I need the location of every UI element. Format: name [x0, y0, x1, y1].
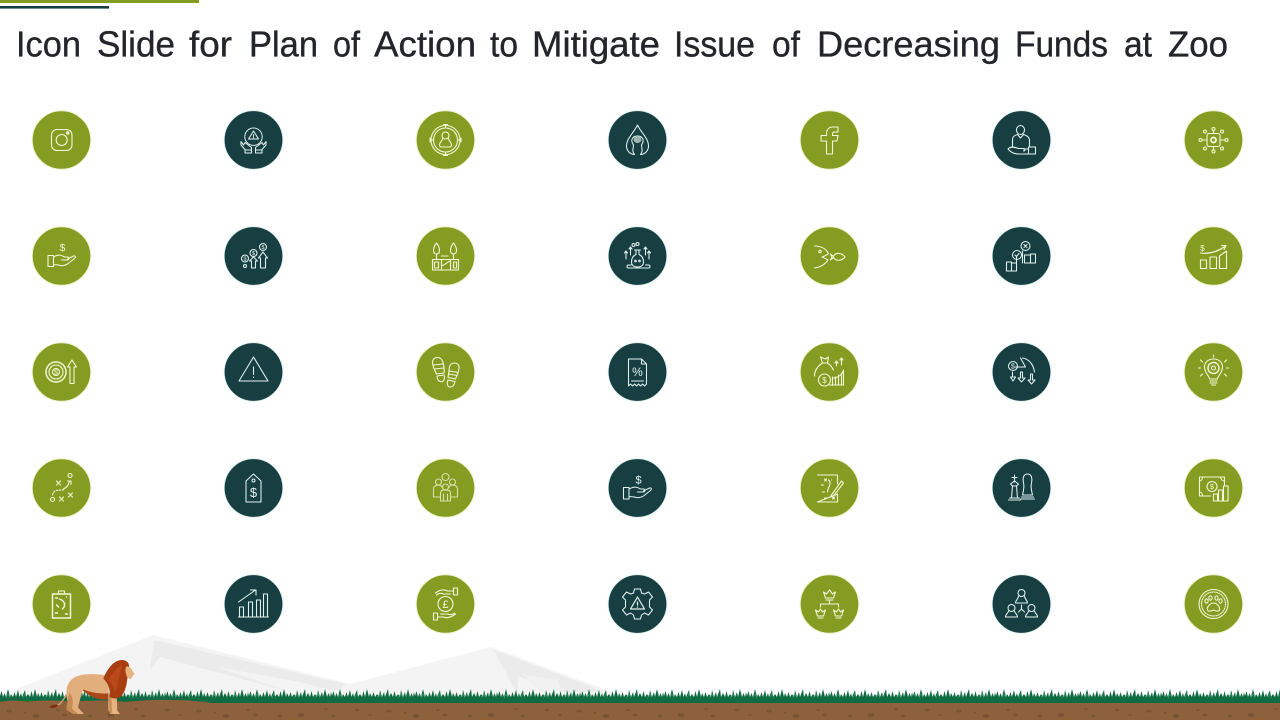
icon: coins with rising arrows: $	[252, 251, 255, 257]
title: for	[189, 24, 232, 64]
mountains	[14, 635, 612, 700]
icon: hands protecting warning	[224, 111, 283, 169]
icon: money bag with bars: $	[822, 376, 827, 385]
icon: percent receipt: %	[632, 365, 643, 379]
title: Icon	[16, 24, 81, 64]
icon: pound coin between hands	[416, 575, 475, 633]
title: Zoo	[1168, 24, 1228, 64]
icon: percent receipt	[608, 343, 667, 401]
icon: group of people	[416, 459, 475, 517]
icon: water drop with hand	[608, 111, 667, 169]
title: to	[490, 24, 518, 64]
icon: gear with warning	[608, 575, 667, 633]
icon: person on hand	[992, 111, 1051, 169]
icon: footprints	[416, 343, 475, 401]
lion	[49, 660, 135, 714]
icon: money bag with bars	[800, 343, 859, 401]
title: Slide	[97, 24, 175, 64]
title: Funds	[1015, 24, 1108, 64]
icon: dollar over hand	[32, 227, 91, 285]
title: of	[333, 24, 361, 64]
icon: clipboard plan	[32, 575, 91, 633]
icon: warning triangle	[224, 343, 283, 401]
icon: gear coin with up arrow: $	[54, 370, 58, 376]
title: of	[772, 24, 801, 64]
icon: gear coin with up arrow	[32, 343, 91, 401]
icon: falling money with arrows: $	[1011, 364, 1015, 370]
icon: zoo gate with trees	[416, 227, 475, 285]
icon: dollar price tag	[224, 459, 283, 517]
icon: light bulb with gear	[1184, 343, 1243, 401]
icon: dollar price tag: $	[250, 485, 258, 500]
icon: chip network	[1184, 111, 1243, 169]
icon: crown hierarchy	[800, 575, 859, 633]
icon: coins with rising arrows: $	[261, 245, 265, 251]
title: Issue	[674, 24, 755, 64]
icon: hands with check and cross	[992, 227, 1051, 285]
icon: pound coin between hands: £	[442, 599, 449, 611]
title: at	[1124, 24, 1152, 64]
title: Plan	[249, 24, 318, 64]
icon: facebook	[800, 111, 859, 169]
icon: dollar over hand: $	[60, 243, 66, 254]
icon: paw in dotted circle	[1184, 575, 1243, 633]
icon: strategy play	[32, 459, 91, 517]
icon: cash note with chart	[1184, 459, 1243, 517]
icon: growth chart with arrow	[224, 575, 283, 633]
icon: target person	[416, 111, 475, 169]
title: Action	[374, 24, 476, 64]
icon: growth bars with dollar: $	[1200, 244, 1205, 253]
title: Mitigate	[532, 24, 660, 64]
icon: chess pieces	[992, 459, 1051, 517]
icon: growth bars with dollar	[1184, 227, 1243, 285]
icon: strategy plan with pencil	[800, 459, 859, 517]
grass and soil ground	[0, 689, 1280, 720]
icon: instagram	[32, 111, 91, 169]
icon: cash note with chart: $	[1210, 484, 1214, 491]
icon: coins with rising arrows: $	[243, 256, 247, 262]
icon: falling money with arrows	[992, 343, 1051, 401]
icon: big fish and small fish	[800, 227, 859, 285]
icon: dollar on open hand	[608, 459, 667, 517]
accent bars	[0, 0, 199, 9]
title: Decreasing	[817, 24, 1000, 64]
icon: coins with rising arrows	[224, 227, 283, 285]
icon: potion with arrows	[608, 227, 667, 285]
icon: dollar on open hand: $	[635, 474, 642, 486]
icon: three connected people	[992, 575, 1051, 633]
